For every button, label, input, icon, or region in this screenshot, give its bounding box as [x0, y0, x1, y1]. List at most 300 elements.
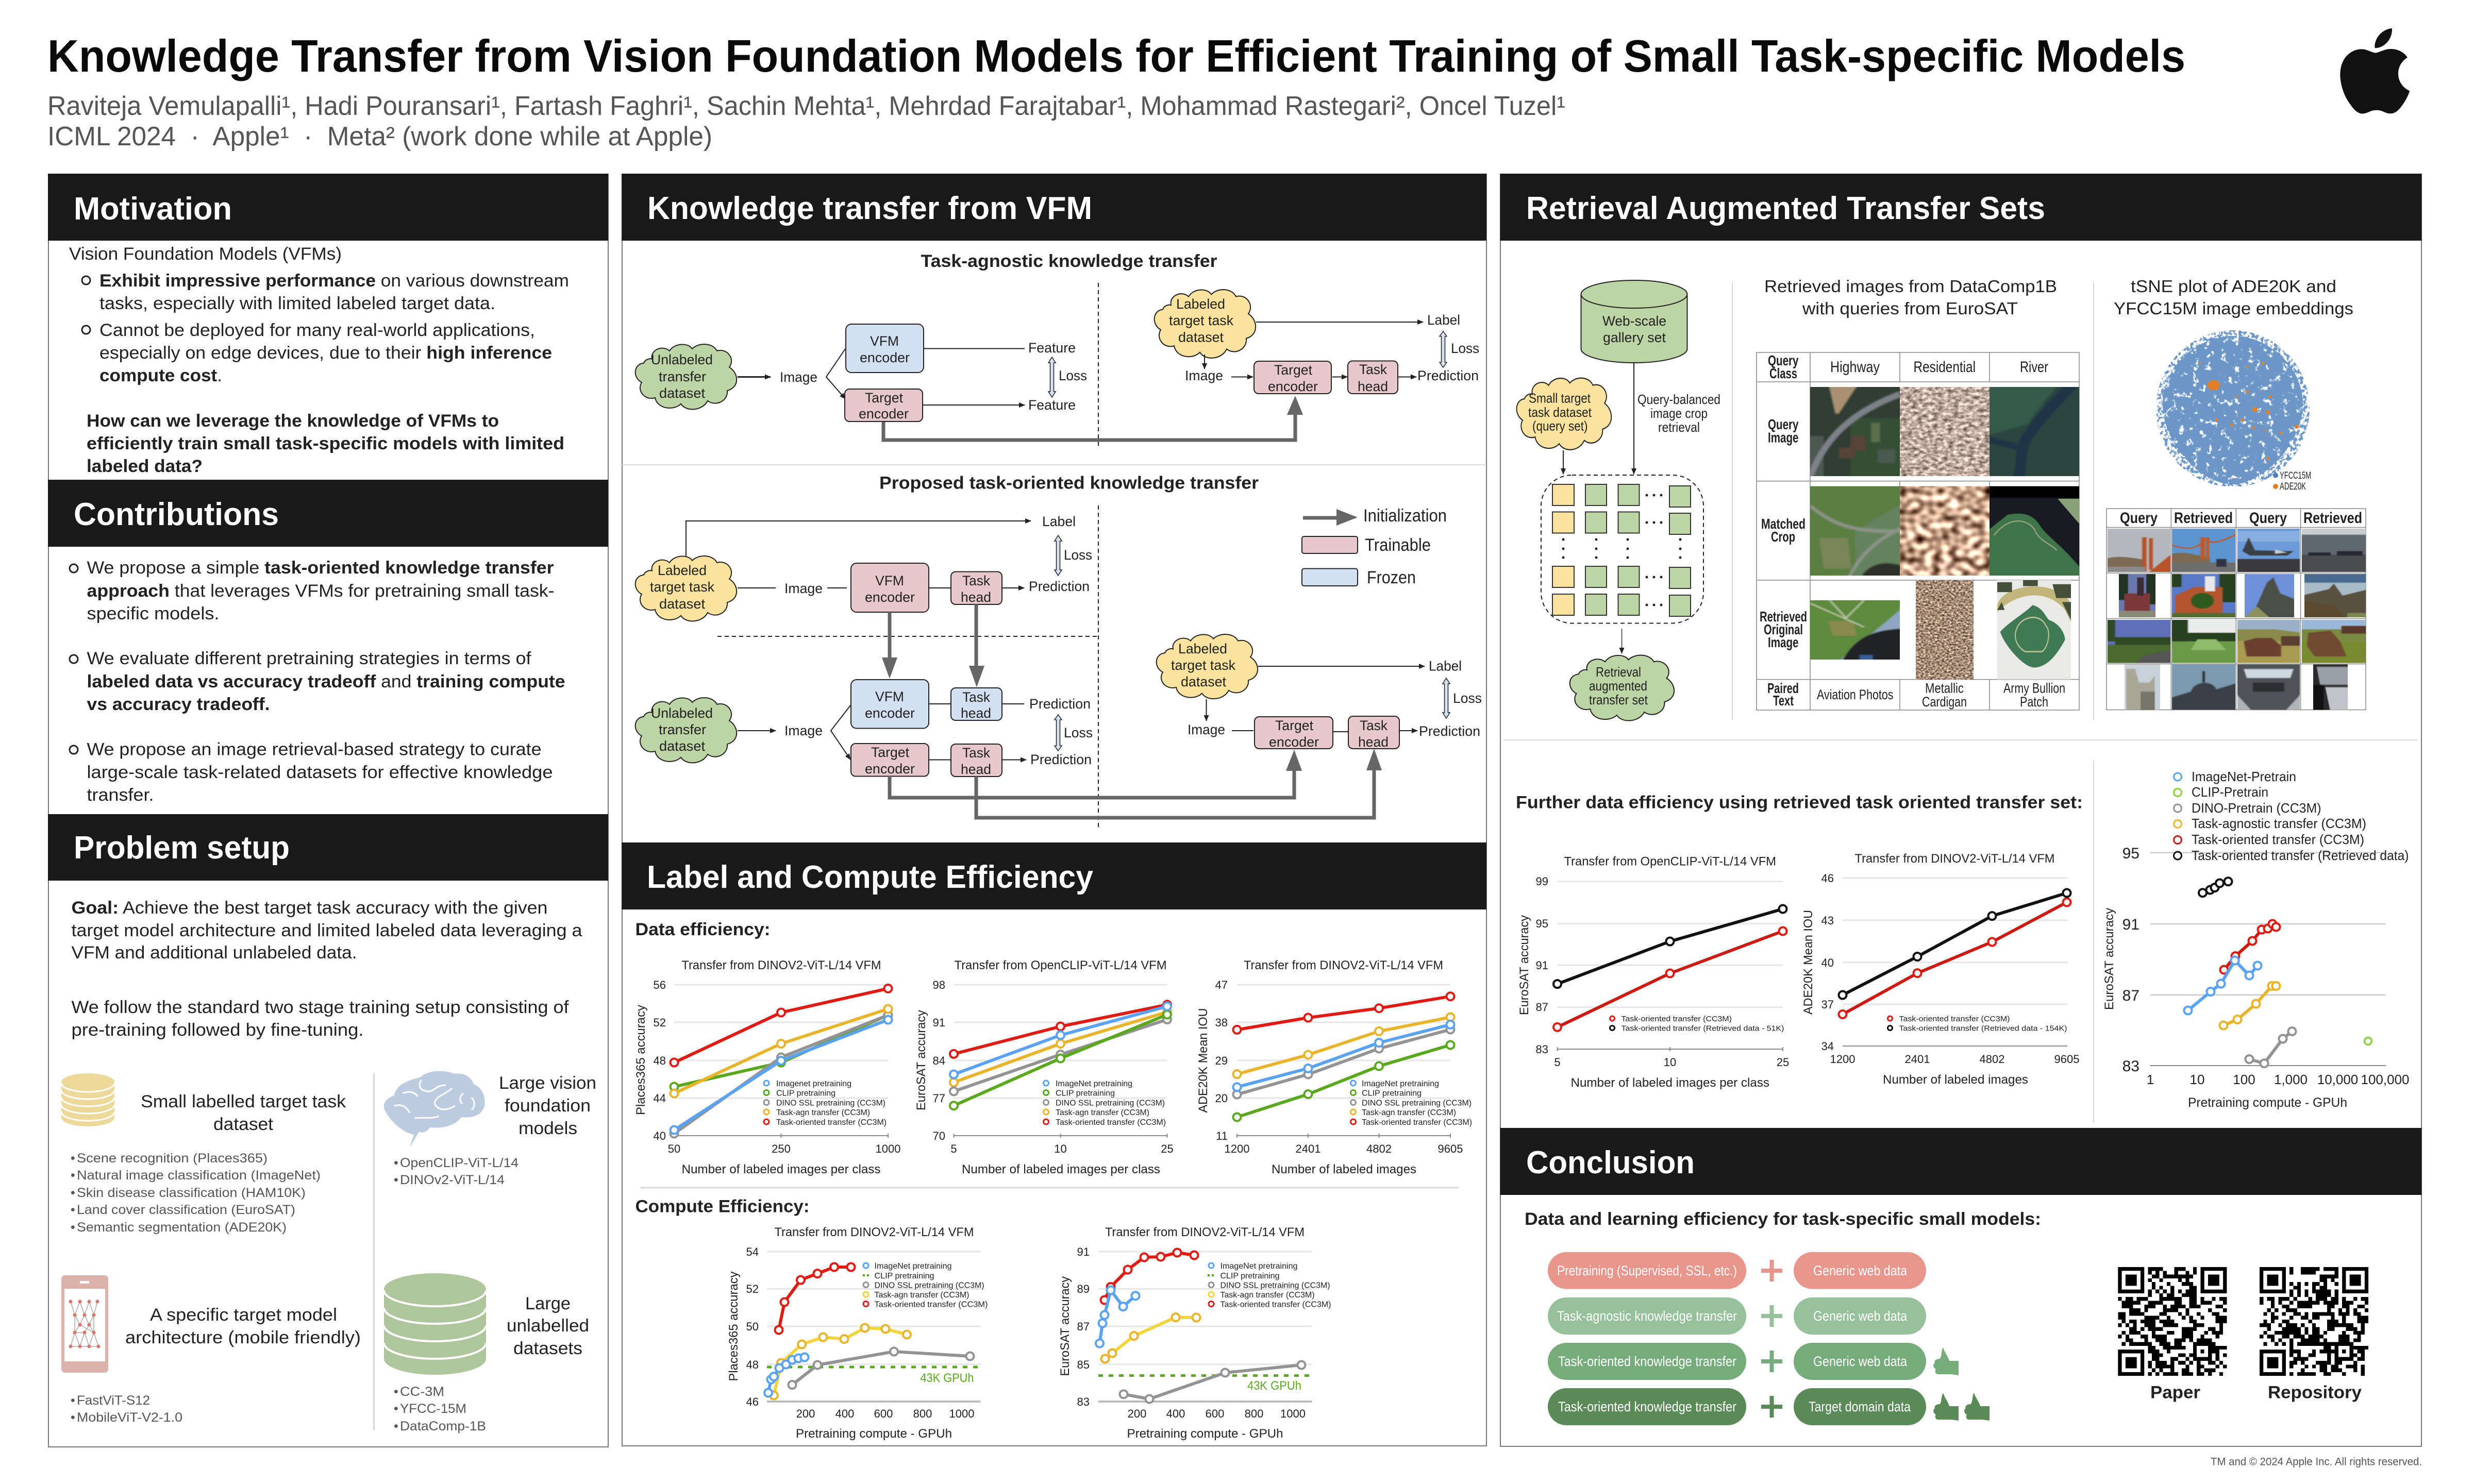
- text: goal: [71, 898, 582, 963]
- legend: CLIP pretraining: [1362, 1089, 1422, 1098]
- row labels: Paired: [1767, 680, 1799, 696]
- image: residential query: [1900, 387, 1990, 476]
- list: target models: MobileViT-V2-1.0: [77, 1410, 182, 1425]
- row text: paired text: Patch: [2020, 694, 2048, 710]
- y axis labels: [746, 1245, 759, 1408]
- row labels: Crop: [1771, 529, 1795, 545]
- icon: labeled target cloud: target task: [1171, 657, 1235, 673]
- row: task-agnostic plus generic web data: Generic web data: [1813, 1308, 1908, 1324]
- list: target tasks: Land cover classification (EuroSAT): [77, 1203, 295, 1217]
- data series: [674, 988, 888, 1134]
- text: large vision foundation models: foundation: [505, 1096, 591, 1116]
- box: task head: head: [1358, 734, 1389, 750]
- bullet list: contributions: We propose a simple task-oriented knowledge transfer: [87, 558, 554, 578]
- list: unlabeled datasets: CC-3M: [400, 1385, 444, 1399]
- heading: conclusion: [1500, 1128, 2421, 1195]
- chart: ADE20K retrieved data efficiency: [1801, 852, 2079, 1087]
- arrows: between boxes and predictions: [929, 704, 1026, 760]
- y axis labels: 43: [1821, 914, 1834, 927]
- x axis labels: 1000: [949, 1407, 974, 1420]
- y axis labels: 91: [2122, 916, 2139, 933]
- box: trainable VFM encoder: [851, 563, 929, 612]
- heading: tSNE plot: [2114, 277, 2353, 318]
- list: VFMs: OpenCLIP-ViT-L/14: [400, 1156, 519, 1170]
- label and loss: Loss: [1064, 547, 1092, 563]
- legend: trainable: Trainable: [1365, 535, 1431, 555]
- icon: retrieval augmented transfer set cloud: Retrieval: [1596, 664, 1641, 680]
- legend: ImageNet pretraining: [1221, 1262, 1298, 1271]
- arrow: cloud to image: [1204, 355, 1205, 369]
- chart: ADE20K data efficiency: [1196, 958, 1472, 1176]
- row labels: Text: [1773, 693, 1794, 709]
- label and loss: Loss: [1453, 690, 1482, 706]
- y axis labels: 87: [1077, 1320, 1090, 1333]
- row: task-oriented plus target domain data: Task-oriented knowledge transfer: [1558, 1399, 1736, 1414]
- list: unlabeled datasets: •: [394, 1402, 398, 1416]
- legend: [2174, 769, 2409, 863]
- row: pretraining plus generic web data: Pretraining (Supervised, SSL, etc.): [1557, 1263, 1737, 1278]
- legend: Task-oriented transfer (Retrieved data): [2192, 848, 2409, 863]
- diagram: task-agnostic stage two: [883, 290, 1479, 440]
- image: cockpit retrieved: [2310, 660, 2351, 714]
- icon: unlabeled transfer cloud: [636, 698, 737, 763]
- legend: CLIP pretraining: [874, 1272, 934, 1280]
- box: task head: [1348, 716, 1399, 750]
- y axis labels: 54: [746, 1245, 759, 1258]
- list: target tasks: [71, 1151, 321, 1235]
- legend: [1043, 1080, 1166, 1127]
- box: task head: head: [1358, 379, 1388, 394]
- x axis labels: 2401: [1905, 1053, 1930, 1066]
- y axis labels: 40: [1821, 956, 1834, 969]
- list: target models: FastViT-S12: [77, 1393, 150, 1408]
- column headers: [2120, 510, 2362, 527]
- legend: ImageNet pretraining: [1362, 1080, 1439, 1088]
- y axis labels: 29: [1215, 1054, 1228, 1067]
- x axis labels: 10: [2190, 1072, 2204, 1087]
- box: trainable task head: Task: [962, 573, 990, 588]
- y axis labels: 47: [1215, 979, 1228, 991]
- row: task-oriented plus generic web data: [1548, 1343, 1959, 1380]
- chart: eurosat compute efficiency: [1058, 1225, 1331, 1441]
- y axis labels: [654, 979, 666, 1142]
- icon: query set cloud: [1517, 378, 1611, 450]
- icon: labeled target cloud: dataset: [1181, 674, 1226, 689]
- loss indicator: Loss: [1059, 368, 1087, 383]
- row labels: Class: [1769, 365, 1797, 381]
- panel: right column: [1500, 174, 2421, 1446]
- row labels: Image: [1768, 634, 1799, 650]
- box: target encoder: encoder: [1269, 734, 1319, 750]
- label and loss: Label: [1429, 659, 1462, 674]
- labels: features: Feature: [1028, 340, 1076, 356]
- list: target tasks: •: [71, 1151, 75, 1166]
- box: target encoder: Target: [1274, 362, 1312, 378]
- icon: labeled target cloud: target task: [1169, 313, 1233, 328]
- arrow: row connections: [1232, 731, 1417, 732]
- icon: unlabeled transfer cloud: [636, 344, 737, 409]
- image: carrier retrieved: [2302, 529, 2366, 572]
- legend: [1208, 1262, 1331, 1309]
- subheading: compute efficiency: Compute Efficiency:: [635, 1196, 809, 1216]
- x axis labels: 9605: [2054, 1053, 2079, 1066]
- row: task-agnostic plus generic web data: [1548, 1297, 1926, 1335]
- y axis labels: 83: [1077, 1395, 1090, 1408]
- x axis labels: 1: [2147, 1072, 2154, 1087]
- arrow: encoder initialization: [890, 750, 1302, 798]
- bullet list: VFM properties: tasks, especially with limited labeled target data.: [99, 294, 495, 313]
- text: small labelled target task dataset: Small labelled target task: [141, 1092, 346, 1111]
- arrow: gallery retrieval: [1633, 363, 1634, 474]
- icon: unlabeled transfer cloud: transfer: [659, 369, 706, 384]
- bullet list: contributions: approach that leverages VFMs for pretraining small task-: [87, 581, 555, 601]
- x axis labels: 250: [772, 1142, 791, 1155]
- legend: Task-oriented transfer (CC3M): [2192, 832, 2364, 847]
- heading: motivation: [48, 174, 608, 241]
- box: target encoder: [851, 744, 929, 777]
- image: red building query: [2119, 574, 2155, 617]
- icon: labeled target cloud: target task: [650, 579, 714, 595]
- legend: Imagenet pretraining: [776, 1080, 851, 1088]
- x axis title: Pretraining compute - GPUh: [1127, 1427, 1283, 1441]
- legend: Task-oriented transfer (Retrieved data - 51K): [1622, 1024, 1784, 1033]
- subheading: data and learning efficiency: Data and learning efficiency for task-specific small models:: [1525, 1209, 2041, 1229]
- arrow: cloud to image: [738, 376, 771, 378]
- legend: Task-agn transfer (CC3M): [874, 1291, 969, 1300]
- text: large unlabelled datasets: unlabelled: [507, 1316, 589, 1336]
- bullet list: VFM properties: [82, 271, 569, 385]
- x axis labels: 1200: [1225, 1142, 1249, 1155]
- label and loss: [1042, 514, 1092, 576]
- label and loss: [1429, 659, 1482, 718]
- chart: eurosat data efficiency: [914, 958, 1174, 1176]
- x axis labels: 100: [2233, 1072, 2255, 1087]
- data series: [954, 1005, 1167, 1106]
- panel: middle column: [622, 174, 1486, 1446]
- row labels: [1760, 352, 1807, 709]
- arrow: label: [1256, 322, 1423, 323]
- icon: labeled target cloud: [1157, 634, 1258, 699]
- heading: retrieved images: [1764, 277, 2057, 318]
- icon: unlabeled transfer cloud: Unlabeled: [651, 352, 713, 367]
- heading: problem setup: [48, 814, 608, 881]
- x axis title: Pretraining compute - GPUh: [2188, 1095, 2347, 1110]
- image: mountain ruins retrieved: [2304, 574, 2366, 617]
- heading: tSNE plot: YFCC15M image embeddings: [2114, 299, 2353, 318]
- box: trainable target encoder: Target: [865, 390, 903, 406]
- subheading: task-oriented: Proposed task-oriented knowledge transfer: [879, 473, 1259, 493]
- list: VFMs: •: [394, 1173, 398, 1187]
- chart title: Transfer from DINOV2-ViT-L/14 VFM: [1854, 852, 2054, 866]
- label: query-balanced retrieval: [1637, 392, 1720, 435]
- y axis labels: 85: [1077, 1358, 1090, 1371]
- x axis labels: [796, 1407, 974, 1420]
- row text: paired text: Aviation Photos: [1817, 687, 1894, 702]
- y axis labels: 40: [654, 1129, 666, 1142]
- list: target tasks: Natural image classification (ImageNet): [77, 1168, 321, 1183]
- x axis title: Number of labeled images per class: [1571, 1076, 1769, 1090]
- text: large vision foundation models: Large vision: [499, 1073, 596, 1093]
- label: prediction: Prediction: [1417, 368, 1479, 383]
- text: research question: efficiently train small task-specific models with limited: [87, 434, 564, 453]
- legend: ImageNet pretraining: [1056, 1080, 1132, 1088]
- box: frozen VFM encoder: VFM: [875, 689, 904, 704]
- x axis labels: 800: [1245, 1407, 1263, 1420]
- icon: query set cloud: task dataset: [1528, 404, 1592, 420]
- icon: labeled target cloud: [1155, 290, 1256, 358]
- labels: features: [1028, 340, 1076, 413]
- heading: contributions: Contributions: [74, 497, 279, 532]
- chart: places365 data efficiency: [634, 958, 900, 1176]
- diagram: task-agnostic stage one: [636, 324, 1087, 421]
- y axis labels: 46: [746, 1395, 759, 1408]
- box: frozen task head: Task: [962, 689, 990, 705]
- subheading: further data efficiency: Further data efficiency using retrieved task oriented transfer set:: [1516, 792, 2083, 812]
- icons: two thumbs up: [1933, 1393, 1990, 1421]
- text: specific target model: architecture (mobile friendly): [125, 1328, 361, 1347]
- list: target tasks: Skin disease classification (HAM10K): [77, 1186, 306, 1200]
- bullet list: VFM properties: Exhibit impressive performance on various downstream: [99, 271, 569, 291]
- list: VFMs: DINOv2-ViT-L/14: [400, 1173, 505, 1187]
- icon: labeled target cloud: dataset: [1178, 330, 1224, 345]
- image: cathedral query: [2125, 665, 2160, 710]
- heading: tSNE plot: tSNE plot of ADE20K and: [2131, 277, 2336, 296]
- y axis labels: [1077, 1245, 1090, 1408]
- image: rusty car retrieved: [2302, 620, 2366, 663]
- icon: unlabeled transfer cloud: Unlabeled: [651, 705, 713, 721]
- icon: query set cloud: Small target: [1529, 391, 1591, 406]
- QR code: paper: [2118, 1267, 2227, 1376]
- y axis labels: 50: [746, 1320, 759, 1333]
- heading: knowledge transfer from VFM: [622, 174, 1486, 241]
- row text: paired text: Army Bullion: [2003, 680, 2065, 696]
- box: task head: [1348, 361, 1398, 394]
- arrow: to prediction: [1398, 376, 1416, 377]
- chart: eurosat retrieved data efficiency: [1517, 854, 1789, 1090]
- bullet list: contributions: specific models.: [87, 604, 220, 623]
- icon: retrieval augmented transfer set cloud: augmented: [1589, 678, 1647, 694]
- box: task head: head: [961, 762, 991, 777]
- list: unlabeled datasets: •: [394, 1419, 398, 1434]
- subheading: data efficiency: Data efficiency:: [635, 920, 770, 939]
- box: frozen VFM encoder: [851, 680, 929, 729]
- chart title: Transfer from DINOV2-ViT-L/14 VFM: [681, 958, 881, 972]
- icon: large green dataset stack: [384, 1273, 486, 1375]
- arrow: initialization: [883, 396, 1303, 440]
- chart legend: ADE20K: [2280, 481, 2306, 492]
- legend: frozen: Frozen: [1367, 568, 1416, 587]
- y axis labels: 46: [1821, 872, 1834, 885]
- bullet list: VFM properties: Cannot be deployed for many real-world applications,: [99, 321, 535, 340]
- y axis labels: 37: [1821, 998, 1834, 1011]
- x axis labels: [1554, 1056, 1789, 1069]
- label: image: Image: [784, 581, 823, 596]
- list: target tasks: Semantic segmentation (ADE20K): [77, 1220, 287, 1235]
- y axis labels: 48: [654, 1054, 666, 1067]
- column labels: Highway: [1830, 359, 1880, 376]
- arrow: into encoder: [1231, 376, 1253, 377]
- column headers: Retrieved: [2303, 510, 2362, 527]
- box: frozen task head: [951, 688, 1002, 721]
- image: metallic cardigan: [1916, 580, 1974, 680]
- diagram: task-oriented stage one: [636, 514, 1092, 687]
- chart title: Transfer from DINOV2-ViT-L/14 VFM: [1105, 1225, 1305, 1239]
- x axis labels: [2147, 1072, 2409, 1087]
- label and loss: [1427, 312, 1479, 367]
- arrow: image fork: [826, 349, 845, 399]
- heading: conclusion: Conclusion: [1526, 1145, 1695, 1181]
- panel: further data efficiency: [1516, 761, 2409, 1122]
- legend: trainable: [1302, 535, 1431, 555]
- y axis labels: 52: [654, 1016, 666, 1029]
- legend: [1887, 1015, 2067, 1033]
- legend: ImageNet-Pretrain: [2192, 769, 2296, 784]
- box: trainable VFM encoder: encoder: [865, 589, 915, 605]
- icon: retrieval augmented transfer set cloud: [1570, 655, 1674, 721]
- legend: Task-agnostic transfer (CC3M): [2192, 816, 2366, 831]
- arrow: VFM weights down: [882, 612, 897, 679]
- y axis title: Places365 accuracy: [727, 1272, 741, 1381]
- image: residential matched crop: [1900, 486, 1990, 576]
- legend: Task-oriented transfer (CC3M): [776, 1118, 887, 1127]
- y axis labels: 87: [1536, 1001, 1548, 1014]
- x axis labels: 9605: [1438, 1142, 1463, 1155]
- x axis labels: 2401: [1296, 1142, 1320, 1155]
- x axis title: Number of labeled images: [1272, 1162, 1416, 1176]
- y axis title: EuroSAT accuracy: [1517, 915, 1531, 1015]
- x axis labels: 25: [1161, 1142, 1174, 1155]
- chart: places365 compute efficiency: [727, 1225, 988, 1441]
- y axis title: EuroSAT accuracy: [1058, 1276, 1072, 1376]
- y axis labels: 56: [654, 979, 666, 991]
- row labels: Query: [1768, 352, 1799, 368]
- label: repository: Repository: [2268, 1383, 2362, 1403]
- box: trainable VFM encoder: VFM: [875, 573, 904, 588]
- row: task-oriented plus target domain data: [1548, 1388, 1990, 1425]
- y axis labels: 87: [2122, 987, 2139, 1004]
- text: specific target model: A specific target model: [150, 1305, 337, 1325]
- label: image: Image: [1185, 368, 1223, 383]
- label: prediction: Prediction: [1029, 579, 1090, 594]
- x axis labels: 400: [835, 1407, 854, 1420]
- venue and affiliations: ICML 2024 · Apple¹ · Meta² (work done while at Apple): [47, 122, 712, 151]
- list: target tasks: •: [71, 1203, 75, 1217]
- legend: Task-oriented transfer (CC3M): [1622, 1015, 1732, 1023]
- x axis labels: 1200: [1830, 1053, 1855, 1066]
- image: cockpit query: [2237, 665, 2300, 710]
- box: task head: Task: [1359, 362, 1387, 377]
- text: two stage training: pre-training followed by fine-tuning.: [71, 1020, 364, 1040]
- heading: retrieved images: Retrieved images from DataComp1B: [1764, 277, 2057, 296]
- x axis labels: [950, 1142, 1174, 1155]
- panel: left column: [48, 174, 608, 1447]
- icon: retrieval augmented transfer set cloud: transfer set: [1589, 692, 1648, 707]
- y axis labels: 20: [1215, 1092, 1228, 1105]
- icon: labeled target cloud: Labeled: [1176, 296, 1225, 312]
- text: large vision foundation models: [499, 1073, 596, 1138]
- icon: thumbs up: [1933, 1347, 1959, 1375]
- image: highway query: [1810, 387, 1900, 476]
- label: prediction: Prediction: [1419, 723, 1480, 739]
- data series: [1100, 1253, 1301, 1399]
- image: highway matched crop: [1810, 486, 1900, 576]
- row: task-oriented plus target domain data: Target domain data: [1809, 1399, 1911, 1414]
- heading: problem setup: Problem setup: [74, 830, 290, 866]
- arrow: query to grid: [1563, 450, 1564, 474]
- box: target encoder: Target: [1275, 718, 1313, 733]
- arrow: image fork: [831, 705, 850, 760]
- heading: label and compute efficiency: [622, 842, 1486, 909]
- x axis labels: 4802: [1366, 1142, 1392, 1155]
- list: unlabeled datasets: [394, 1385, 486, 1434]
- x axis title: Number of labeled images: [1883, 1073, 2028, 1087]
- row: pretraining plus generic web data: Generic web data: [1813, 1263, 1908, 1278]
- row text: paired text: Metallic: [1925, 680, 1964, 696]
- list: VFMs: •: [394, 1156, 398, 1170]
- image: aviation photo: [1810, 600, 1900, 660]
- legend: Task-agn transfer (CC3M): [1221, 1291, 1314, 1300]
- legend: DINO SSL pretraining (CC3M): [776, 1099, 885, 1108]
- text: two stage training: We follow the standard two stage training setup consisting of: [71, 998, 569, 1017]
- panel: conclusion: [1500, 1128, 2421, 1425]
- legend: Task-oriented transfer (CC3M): [1056, 1118, 1166, 1127]
- data series: [1558, 909, 1783, 1027]
- row labels: Original: [1764, 621, 1803, 637]
- y axis title: ADE20K Mean IOU: [1196, 1008, 1210, 1113]
- bullet list: contributions: transfer.: [87, 785, 154, 805]
- chart title: Transfer from DINOV2-ViT-L/14 VFM: [1244, 958, 1443, 972]
- legend: frozen: [1302, 568, 1416, 587]
- row labels: Matched: [1761, 516, 1806, 532]
- bullet list: contributions: [70, 558, 565, 805]
- bullet list: contributions: We propose an image retrieval-based strategy to curate: [87, 740, 541, 760]
- icon: gallery cylinder: [1581, 280, 1687, 363]
- list: unlabeled datasets: •: [394, 1385, 398, 1399]
- bullet list: contributions: large-scale task-related datasets for effective knowledge: [87, 763, 553, 782]
- x axis labels: 200: [1128, 1407, 1146, 1420]
- labels: predictions and loss: Prediction: [1029, 696, 1091, 712]
- text: research question: How can we leverage the knowledge of VFMs to: [87, 411, 499, 431]
- icon: labeled target cloud: [636, 556, 737, 621]
- legend: DINO SSL pretraining (CC3M): [1221, 1281, 1330, 1290]
- legend: [1350, 1080, 1472, 1127]
- row text: paired text: Cardigan: [1922, 694, 1967, 710]
- box: target encoder: [1254, 361, 1331, 394]
- heading: contributions: [48, 480, 608, 547]
- panel: retrieval augmented transfer sets: [1500, 174, 2421, 721]
- x axis labels: 25: [1777, 1056, 1789, 1069]
- y axis labels: 70: [933, 1129, 945, 1142]
- x axis labels: 10: [1054, 1142, 1067, 1155]
- legend: Task-agn transfer (CC3M): [1056, 1108, 1149, 1117]
- icon: gallery cylinder: gallery set: [1603, 330, 1666, 345]
- image: golf course retrieved: [2172, 620, 2235, 663]
- text: two stage training: [71, 998, 569, 1040]
- title: Knowledge Transfer from Vision Foundation Models for Efficient Training of Small Task-specific Models: [47, 30, 2185, 81]
- image: river query: [1990, 387, 2079, 476]
- y axis title: ADE20K Mean IOU: [1801, 910, 1815, 1015]
- arrows: features: [923, 348, 1025, 405]
- x axis labels: 1,000: [2274, 1072, 2308, 1087]
- loss indicator: [1048, 357, 1087, 397]
- x axis labels: 5: [950, 1142, 957, 1155]
- y axis labels: 89: [1077, 1283, 1090, 1295]
- heading: retrieval augmented transfer sets: [1500, 174, 2421, 241]
- x axis labels: 5: [1554, 1056, 1561, 1069]
- x axis labels: [1128, 1407, 1306, 1420]
- data series: [768, 1267, 970, 1395]
- legend: CLIP pretraining: [776, 1089, 835, 1098]
